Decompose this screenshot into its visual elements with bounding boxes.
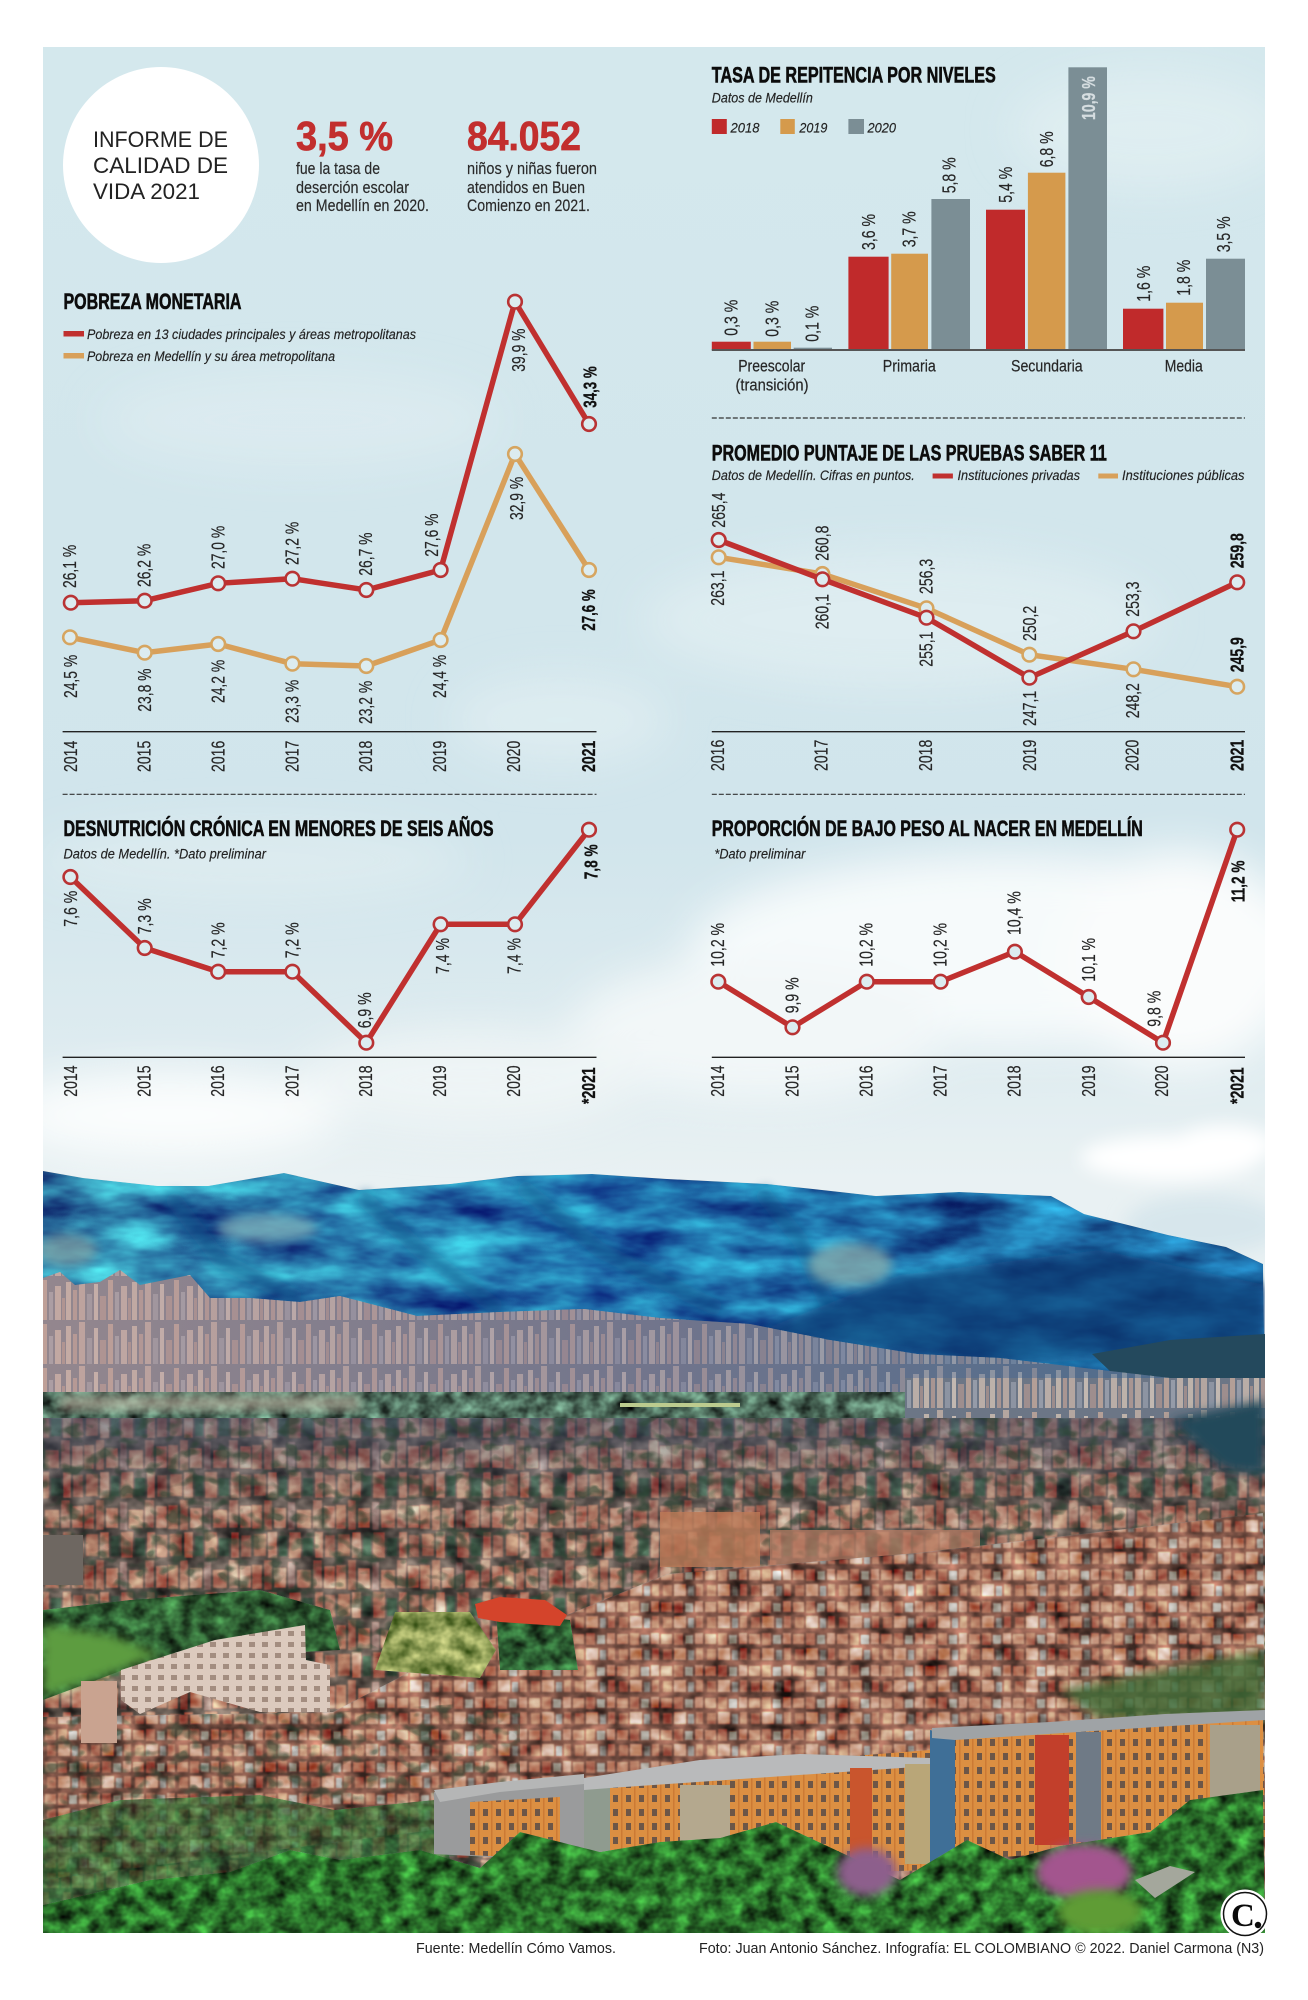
year labels: *2021	[1228, 1067, 1248, 1104]
values: 13 ciudades: 39,9 %	[509, 329, 530, 372]
stat: children served: Comienzo en 2021.	[467, 197, 590, 215]
year labels: 2019	[430, 1065, 451, 1097]
values: 13 ciudades: 27,2 %	[283, 522, 303, 565]
values: 7,8 %	[581, 844, 602, 879]
year labels: 2019	[430, 741, 451, 772]
photo: lower-left green slope	[43, 1795, 450, 1905]
bar values: 3,6 %	[859, 214, 880, 250]
values: Medellín: 24,5 %	[61, 655, 82, 698]
heading: TASA DE REPITENCIA POR NIVELES	[712, 63, 996, 88]
year labels: 2021	[579, 741, 600, 772]
category labels	[736, 357, 1203, 395]
photo: distant skyline	[43, 1270, 1170, 1392]
year labels: 2014	[61, 1065, 82, 1097]
year labels: 2015	[783, 1065, 803, 1097]
subtitle: Datos de Medellín	[712, 90, 813, 105]
heading: POBREZA MONETARIA	[64, 289, 242, 314]
bar values: 5,8 %	[940, 157, 960, 193]
source credit: Fuente: Medellín Cómo Vamos.	[416, 1941, 616, 1957]
year labels: 2019	[1079, 1065, 1100, 1097]
values: 10,2 %	[857, 923, 877, 967]
legend: Instituciones privadas	[958, 468, 1080, 483]
subtitle: Datos de Medellín. *Dato preliminar	[64, 846, 266, 861]
values: 248,2	[1123, 683, 1144, 718]
values: 259,8	[1228, 533, 1248, 568]
values: 6,9 %	[355, 992, 376, 1028]
values: 13 ciudades: 27,6 %	[422, 514, 443, 557]
values: Medellín	[61, 477, 600, 724]
stat: school dropout rate: fue la tasa de	[296, 160, 380, 178]
values: 7,4 %	[505, 938, 525, 974]
line series	[712, 823, 1244, 1049]
line: 13 ciudades	[64, 295, 596, 610]
year labels: 2014	[708, 1065, 729, 1097]
values: 13 ciudades: 26,7 %	[356, 533, 377, 576]
bar values: 3,5 %	[1214, 216, 1235, 252]
year labels: 2020	[504, 741, 525, 772]
values: 10,2 %	[708, 923, 729, 967]
year labels: 2016	[209, 741, 229, 772]
year labels: 2017	[283, 1065, 303, 1097]
values: 250,2	[1020, 606, 1041, 641]
values: 13 ciudades: 27,0 %	[209, 526, 229, 569]
values	[61, 844, 602, 1028]
values: Medellín: 23,2 %	[356, 681, 377, 724]
bar values: 1,8 %	[1174, 259, 1195, 296]
category labels: Media	[1165, 357, 1203, 376]
year labels: *2021	[579, 1067, 600, 1104]
stat: children served: niños y niñas fueron	[467, 160, 597, 178]
title	[93, 127, 228, 204]
values: 256,3	[917, 559, 937, 594]
stat: children served: atendidos en Buen	[467, 179, 585, 197]
year labels: 2021	[1228, 740, 1248, 771]
year labels: 2020	[1123, 740, 1143, 771]
title: CALIDAD DE	[93, 153, 228, 178]
legend: 2018	[730, 120, 760, 135]
photo: white apartment blocks	[81, 1625, 330, 1743]
values: Medellín: 23,3 %	[283, 680, 303, 723]
values: Medellín: 27,6 %	[579, 589, 600, 631]
stat: children served: 84.052	[467, 113, 581, 159]
category labels: Primaria	[883, 357, 936, 376]
values: 9,8 %	[1145, 990, 1165, 1027]
bar values	[722, 76, 1235, 342]
bar values: 10,9 %	[1079, 76, 1100, 120]
values: 7,4 %	[433, 938, 454, 974]
legend: Pobreza en Medellín y su área metropolitana	[87, 349, 335, 364]
values: 10,4 %	[1005, 891, 1025, 935]
logo: El Colombiano	[1220, 1890, 1270, 1938]
values: Medellín: 24,2 %	[208, 660, 229, 703]
legend: Instituciones públicas	[1122, 468, 1245, 483]
year labels: 2016	[708, 740, 729, 771]
values: 13 ciudades	[60, 329, 601, 588]
line: instituciones privadas	[712, 533, 1244, 684]
year labels: 2016	[208, 1065, 229, 1097]
chart: proporción de bajo peso al nacer	[708, 816, 1249, 1104]
title: INFORME DE	[93, 127, 228, 152]
values: Medellín: 24,4 %	[430, 655, 451, 698]
values: 10,1 %	[1079, 938, 1100, 982]
values: 7,2 %	[209, 922, 229, 958]
values: Medellín: 32,9 %	[507, 477, 528, 520]
legend	[64, 327, 416, 364]
bar values: 6,8 %	[1037, 131, 1058, 167]
legend	[933, 468, 1245, 483]
year labels: 2017	[283, 741, 303, 772]
stat: school dropout rate: deserción escolar	[296, 179, 409, 197]
panel: sky background	[43, 47, 1265, 1334]
photo: red building	[475, 1597, 567, 1626]
values: 10,2 %	[931, 923, 951, 967]
photo: middle city	[43, 1400, 1265, 1933]
stat: school dropout rate: en Medellín en 2020.	[296, 197, 429, 215]
bar values: 0,1 %	[803, 305, 823, 342]
year labels: 2014	[61, 741, 82, 772]
chart: tasa de repitencia por niveles	[712, 63, 1245, 395]
heading: PROPORCIÓN DE BAJO PESO AL NACER EN MEDELLÍN	[712, 816, 1143, 841]
photo: hillside neighbourhoods	[43, 1513, 1265, 1890]
values	[708, 493, 1248, 726]
year labels: 2020	[1152, 1065, 1173, 1097]
category labels: Secundaria	[1011, 357, 1083, 376]
year labels	[708, 740, 1248, 771]
values: 9,9 %	[783, 977, 803, 1013]
year labels: 2017	[812, 740, 832, 771]
photo: green hill and grass	[43, 1590, 578, 1700]
bar values: 5,4 %	[996, 166, 1017, 203]
year labels: 2017	[931, 1065, 951, 1097]
year labels: 2018	[356, 741, 377, 772]
photo: valley strip	[43, 1378, 1265, 1422]
bar values: 0,3 %	[722, 299, 742, 336]
category labels: Preescolar	[738, 357, 805, 376]
values: 265,4	[709, 493, 729, 528]
values: 7,3 %	[135, 898, 156, 934]
values: 11,2 %	[1229, 860, 1249, 902]
subtitle: Datos de Medellín. Cifras en puntos.	[712, 468, 915, 483]
values: 253,3	[1123, 582, 1144, 617]
year labels: 2015	[135, 741, 155, 772]
values: 263,1	[708, 571, 729, 606]
stat: school dropout rate	[296, 113, 429, 215]
year labels: 2020	[504, 1065, 525, 1097]
year labels: 2016	[857, 1065, 877, 1097]
title: VIDA 2021	[93, 179, 200, 204]
year labels	[61, 741, 600, 772]
year labels	[708, 1065, 1248, 1104]
year labels	[61, 1065, 600, 1104]
legend: Pobreza en 13 ciudades principales y áreas metropolitanas	[87, 327, 416, 342]
year labels: 2018	[1005, 1065, 1025, 1097]
values: 7,6 %	[61, 890, 82, 927]
year labels: 2019	[1020, 740, 1041, 771]
legend: 2020	[867, 120, 896, 135]
bar values: 0,3 %	[763, 300, 783, 337]
bars	[712, 67, 1245, 350]
values: 13 ciudades: 34,3 %	[580, 366, 601, 408]
photo and graphic credit: Foto: Juan Antonio Sánchez. Infografía: EL COLOMBIANO © 2022. Daniel Carmona (N3)	[699, 1941, 1264, 1957]
values: 247,1	[1020, 691, 1041, 726]
category labels: (transición)	[736, 376, 808, 395]
photo: mountains	[37, 1171, 1265, 1400]
legend	[712, 119, 896, 135]
photo: panorama of Medellín	[37, 1171, 1265, 1934]
stat: children served	[467, 113, 597, 215]
year labels: 2018	[356, 1065, 377, 1097]
chart: desnutrición crónica	[61, 816, 602, 1104]
values: 13 ciudades: 26,1 %	[60, 545, 81, 588]
values: 245,9	[1228, 637, 1248, 672]
legend: 2019	[798, 120, 828, 135]
heading: PROMEDIO PUNTAJE DE LAS PRUEBAS SABER 11	[712, 441, 1107, 466]
logo: El Colombiano: C	[1231, 1898, 1255, 1934]
photo: foreground trees	[43, 1790, 1265, 1934]
values: Medellín: 23,8 %	[135, 669, 155, 712]
values: 13 ciudades: 26,2 %	[135, 544, 155, 587]
subtitle: *Dato preliminar	[714, 846, 806, 861]
year labels: 2015	[135, 1065, 155, 1097]
year labels: 2018	[916, 740, 936, 771]
values: 7,2 %	[283, 922, 303, 958]
values	[708, 860, 1249, 1027]
values: 260,8	[813, 526, 833, 561]
heading: DESNUTRICIÓN CRÓNICA EN MENORES DE SEIS AÑOS	[64, 816, 494, 841]
bar values: 1,6 %	[1134, 265, 1155, 302]
line series	[64, 823, 596, 1049]
line: Medellín	[63, 447, 596, 673]
chart: pobreza monetaria	[60, 289, 601, 772]
badge circle: informe title	[63, 67, 259, 263]
chart: promedio puntaje pruebas saber 11	[708, 441, 1248, 771]
bar values: 3,7 %	[900, 211, 920, 247]
photo: foreground apartment blocks	[434, 1710, 1265, 1880]
values: 260,1	[813, 594, 833, 629]
stat: school dropout rate: 3,5 %	[296, 113, 393, 159]
line: instituciones públicas	[712, 550, 1244, 694]
values: 255,1	[917, 632, 937, 667]
